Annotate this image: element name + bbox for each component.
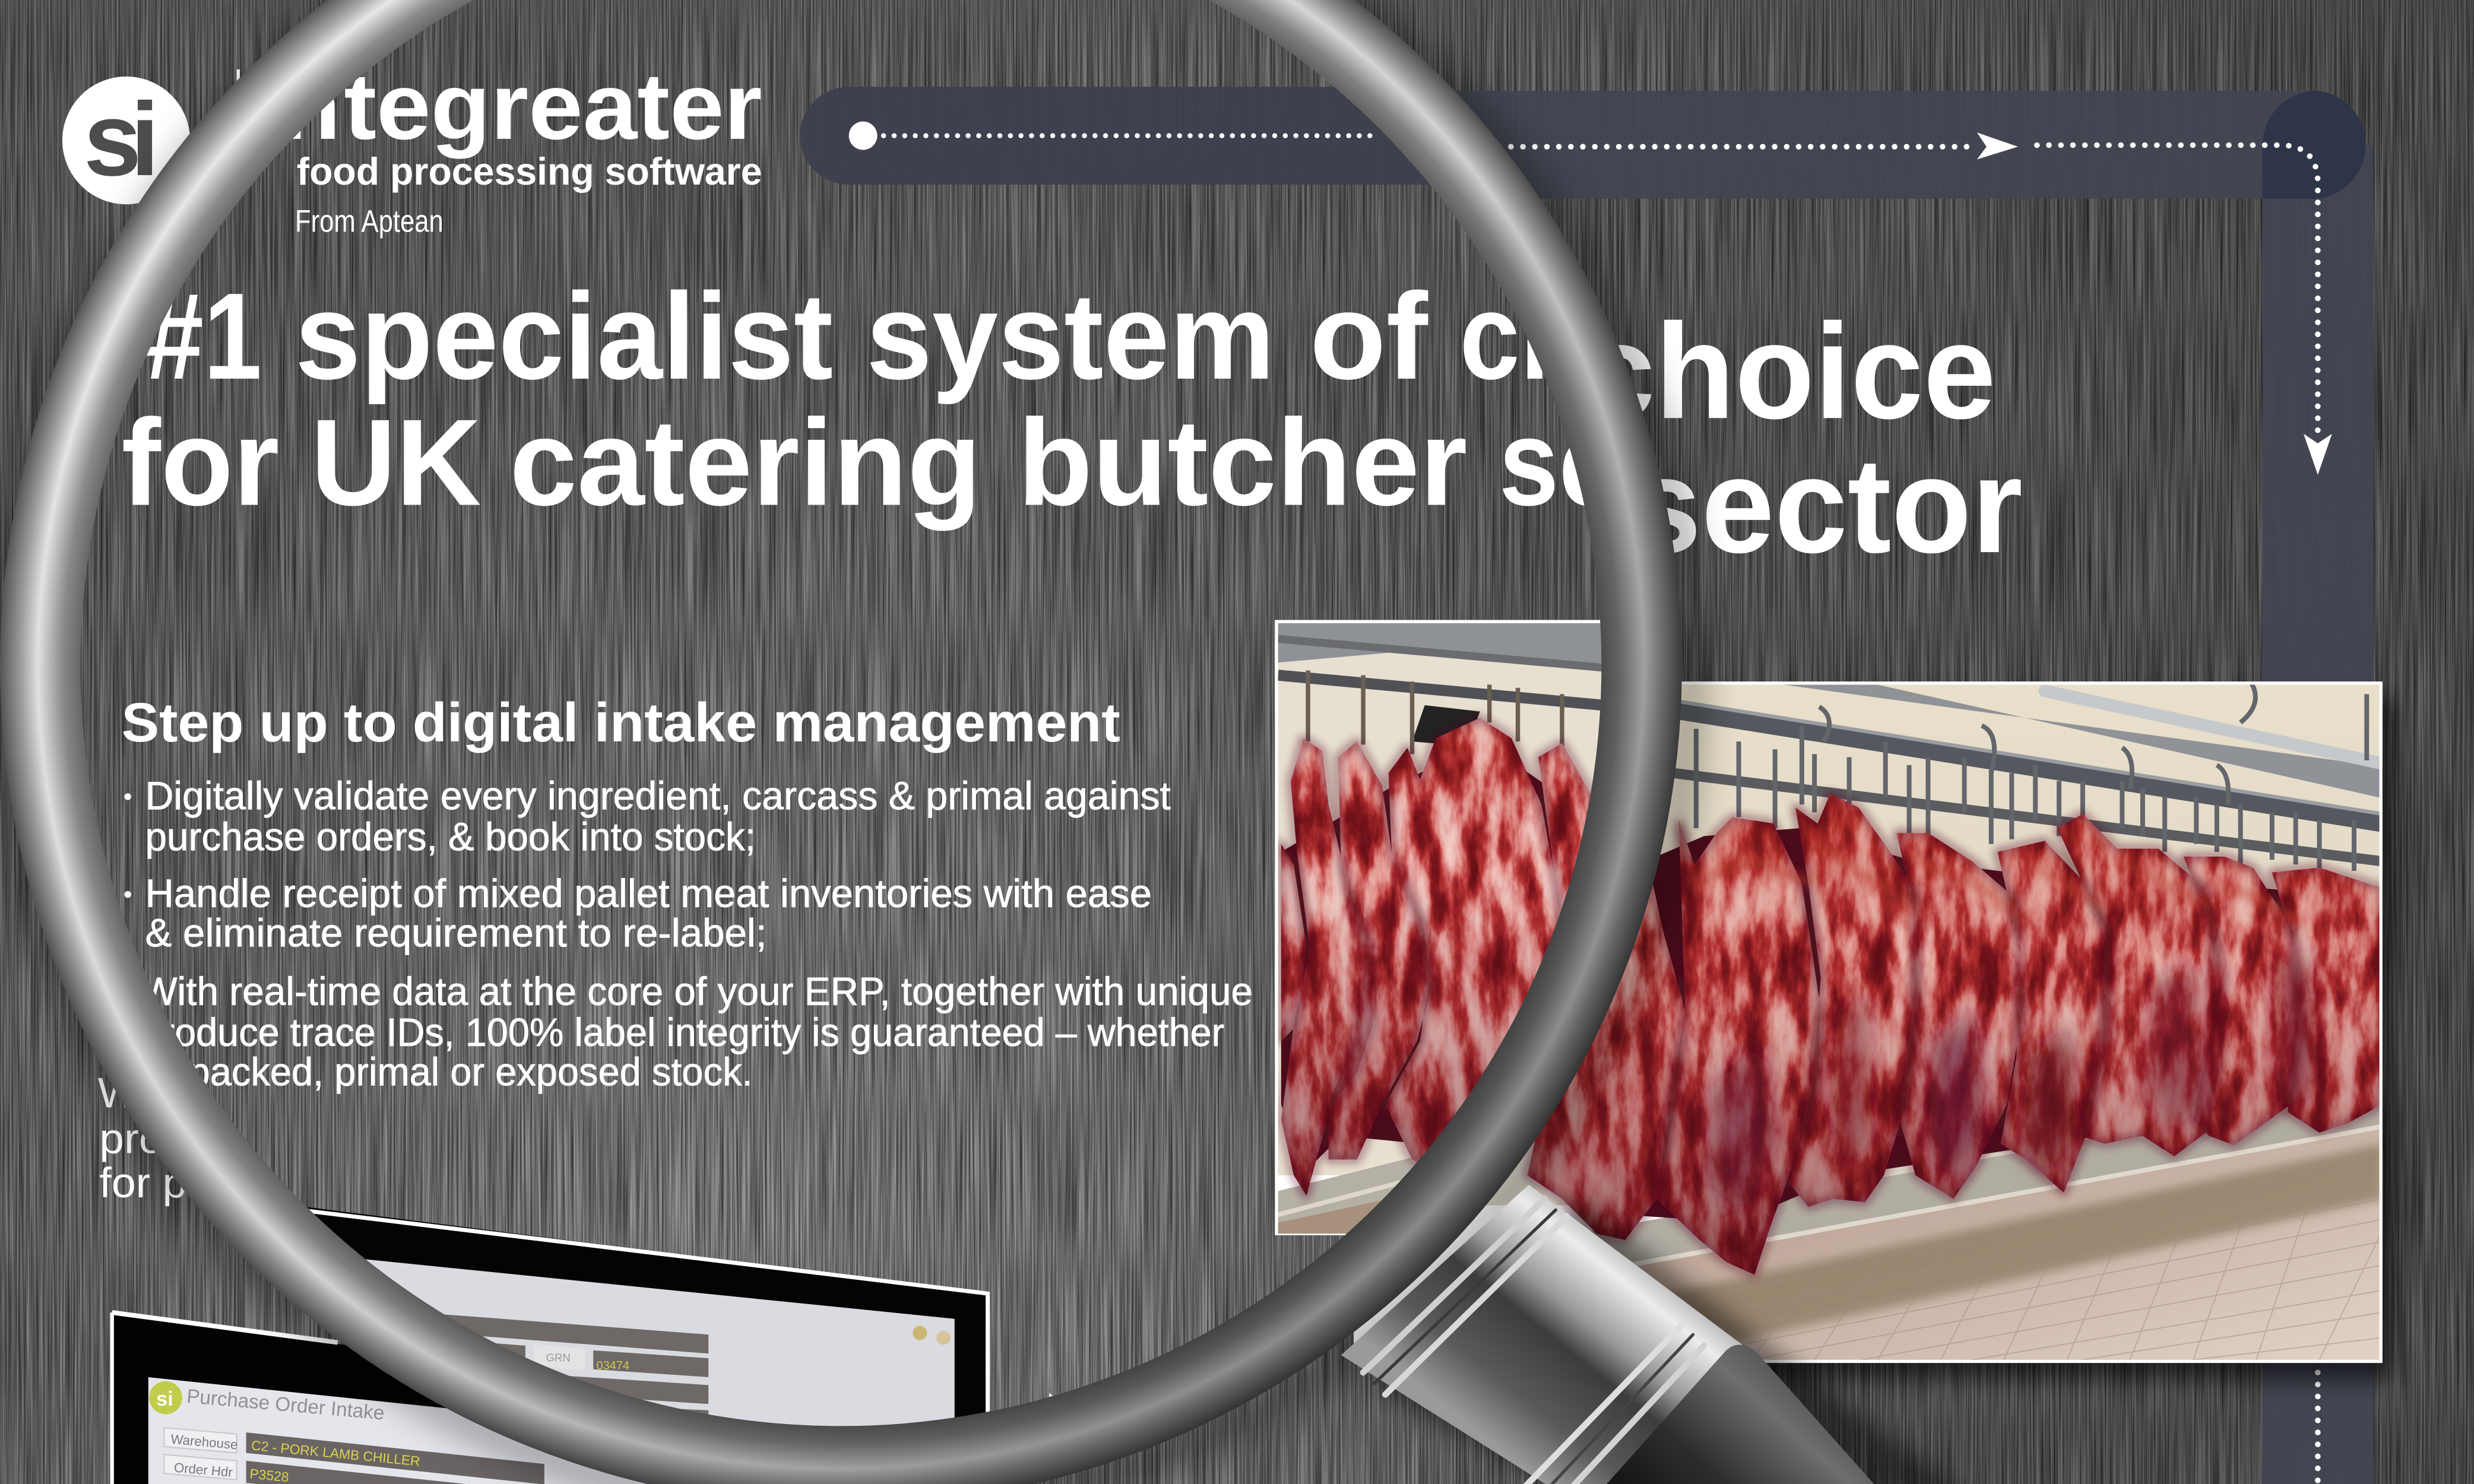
form row 1 [164,1428,544,1484]
magnifying glass [16,0,1972,1484]
slate process band [1455,90,2373,1484]
band corner cap [2263,91,2366,199]
handle shadow [1373,1199,1972,1484]
screen [237,1246,955,1484]
dotted arrow across and down the band [1499,132,2332,1484]
screen heading: Purchase Order Intake [186,1385,385,1425]
form row 1: Warehouse [170,1432,239,1453]
main title, inside lens: for [122,393,279,531]
bullet 3 [120,970,1253,1094]
small arrow tip [1049,1393,1070,1416]
dark mass behind carcasses [1578,828,2383,1223]
screen logo [149,1381,182,1415]
main title, inside lens: sector [1499,393,1822,531]
main title, inside lens: choice [1459,267,1804,405]
main title, inside lens: #1 [145,267,262,405]
bullet 3: produce trace IDs, 100% label integrity is guaranteed – whether [141,1011,1224,1055]
logo wordmark: food processing software [297,150,762,193]
photo: carcasses on rail, outside lens [1354,678,2383,1363]
floor shadow band [1625,1144,2383,1341]
floor tile grid [1641,1159,2383,1360]
form rows [316,1305,708,1429]
bullet 2: & eliminate requirement to re-label; [145,912,767,956]
dotted arrow, inside lens [849,122,1376,150]
main title, inside lens: system [866,267,1275,405]
lens ring [40,0,1642,1466]
logo wordmark: tegreater [344,53,762,159]
hooks [1696,678,2367,876]
layer: content seen through the magnifier [120,53,1822,1484]
bullet 1: Digitally validate every ingredient, carcass & primal against [145,774,1171,818]
carcass tone overlay [1527,794,2383,1274]
logo circle outside lens [62,77,190,204]
field label [533,1344,629,1372]
logo wordmark: From Aptean [295,204,444,239]
tablet screen, front (outside lens): si [156,1388,173,1410]
orange-red spine tops [1689,844,2304,923]
screen [148,1377,679,1484]
form row 2: Order Hdr [173,1460,233,1480]
small logo stub [237,69,240,91]
rails [1278,639,1689,713]
tablet screen, back (inside lens) [237,1202,988,1484]
bullet 3: pre-packed, primal or exposed stock. [120,1050,753,1094]
hooks [1308,670,1562,754]
field label: 03474 [597,1359,629,1372]
main title, inside lens: specialist [295,267,833,405]
partial intro paragraph outside lens: for packing and dispatch [99,1159,573,1207]
bullet 1 [125,774,1171,859]
partial intro paragraph outside lens: W [98,1070,138,1117]
bullet 1: purchase orders, & book into stock; [145,815,756,859]
main title, inside lens: of [1310,267,1428,405]
bullet 2: Handle receipt of mixed pallet meat inventories with ease [145,872,1152,916]
rails and beam [1672,684,2383,861]
carcass shading [1281,718,1600,1196]
title outside lens: sector [1629,430,2023,581]
carcass silhouettes [1527,794,2383,1274]
window icons [913,1326,951,1345]
form row 2 [164,1454,544,1484]
photo: carcasses on rail, inside lens [1275,620,1701,1235]
logo wordmark [252,53,762,239]
logo wordmark: in [252,53,341,159]
shadow under glass [16,0,1689,1484]
carcass silhouettes [1281,718,1600,1196]
carcass tone overlay [1281,718,1600,1196]
title outside lens: choice [1582,296,1996,447]
title outside lens: for [79,430,237,581]
handle: metal ferrule [1341,1185,1744,1484]
main title, inside lens [122,267,1822,531]
bullet 3: With real-time data at the core of your ERP, together with unique [141,970,1253,1014]
tablet screen, front (outside lens) [112,1312,679,1484]
partial intro paragraph outside lens [98,1070,573,1207]
main title, inside lens: butcher [1018,393,1467,531]
form row 1: C2 - PORK LAMB CHILLER [251,1437,421,1469]
main title, inside lens: catering [509,393,981,531]
logo circle outside lens: si [84,81,153,198]
photo shadow, outside lens [1389,697,2395,1379]
bullet list [120,774,1253,1094]
title outside lens [79,296,2023,581]
bullet 2 [125,872,1152,956]
partial intro paragraph outside lens: produce and processing [99,1115,573,1163]
band, inside lens [800,87,1672,185]
title outside lens: #1 [145,296,287,447]
section heading: Step up to digital intake management [122,692,1120,753]
dark mass behind carcasses [1281,741,1596,1175]
field label: GRN [546,1351,571,1363]
carcass shading [1527,794,2383,1274]
main title, inside lens: UK [311,393,482,531]
handle: black grip [1594,1345,1887,1484]
chiller unit [1412,705,1480,746]
